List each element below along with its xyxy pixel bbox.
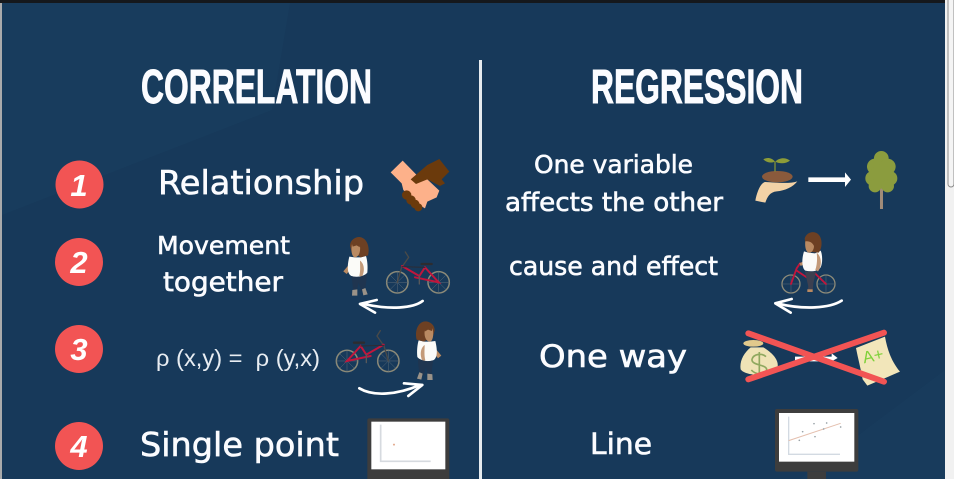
icon: monitor with single point [367,418,449,479]
text: movement together: Movement [157,231,290,260]
icon: seedling grows into tree [755,151,897,209]
text: one variable affects the other: One variable [534,150,693,179]
text: cause and effect: cause and effect [509,252,718,282]
number badge 4 [55,422,103,470]
heading: correlation: CORRELATION [141,61,372,114]
text: symmetry formula: ρ (x,y) = ρ (y,x) [156,345,320,371]
icon: bike and person reversed [336,321,441,396]
text: movement together [157,231,290,298]
number badge 3: 3 [70,332,88,367]
money bag [740,340,778,376]
hidden arrow [795,353,838,361]
number badge 2 [55,238,103,286]
tree [865,151,897,209]
icon: person and bike moving apart [343,237,449,313]
text: single point: Single point [140,425,339,464]
icon: person riding bike with arrow [775,232,842,313]
number badge 3 [55,325,103,373]
text: movement together: together [163,267,284,298]
red cross [748,333,884,382]
icon: monitor with regression line [775,409,858,479]
grade note: A+ [861,344,885,367]
number badge 1: 1 [70,168,88,203]
number badge 4: 4 [69,429,88,464]
sprout in hand [755,158,797,203]
icon: crossed-out money to grade [740,333,900,386]
text: one variable affects the other: affects the other [505,188,723,218]
text: relationship: Relationship [158,163,364,202]
number badge 1 [56,160,104,208]
heading: regression: REGRESSION [591,61,803,114]
grade note [856,337,900,386]
text: one way: One way [539,339,687,375]
text: line: Line [590,427,652,461]
centre divider [479,60,482,479]
arrow [808,172,851,187]
icon: handshake [391,159,449,211]
number badge 2: 2 [69,245,88,280]
text: one variable affects the other [505,150,723,218]
